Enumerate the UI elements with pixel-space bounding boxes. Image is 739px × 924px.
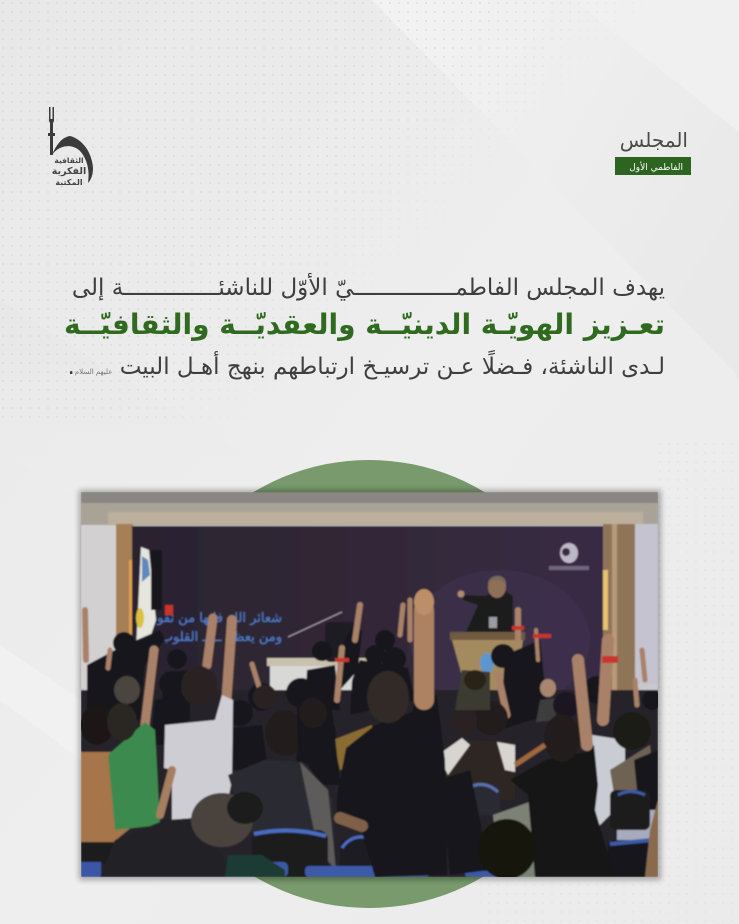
- boy in green shirt: [107, 703, 160, 830]
- logo calligraphy: [52, 156, 86, 187]
- room: ceiling, walls and curtains: [81, 492, 658, 692]
- man in black shirt at centre with raised arm: [337, 589, 447, 877]
- back row crowd: [81, 628, 662, 877]
- boy in white shirt: [160, 666, 233, 820]
- logo calligraphy: الفكرية: [52, 166, 86, 177]
- mid row heads and bodies: [114, 670, 658, 840]
- heading: council name: المجلس: [620, 128, 688, 152]
- backdrop calligraphy: ومن يعظم ـــــ القلوب: [161, 630, 282, 645]
- label: first Fatimid council: الفاطمي الأول: [629, 161, 683, 173]
- text line 1: يهدف المجلس الفاطمـــــــــــــــيّ الأوّل للناشئــــــــــــــة إلى: [72, 273, 665, 301]
- main statement text: [64, 273, 665, 380]
- boy in black shirt at right with raised arm: [510, 660, 615, 877]
- front seats with blue trim: [81, 770, 653, 877]
- microphone stand and chair: [288, 612, 342, 637]
- logo calligraphy: الثقافية: [54, 156, 84, 165]
- green circle behind photo: [145, 460, 593, 908]
- backdrop calligraphy: شعائر الله فإنها من تقوى: [147, 611, 282, 626]
- table on stage: [266, 656, 368, 692]
- backdrop calligraphy: [147, 611, 282, 645]
- red wristbands: [165, 605, 618, 663]
- speaker: [458, 576, 513, 632]
- photo shadow: [79, 490, 661, 880]
- front bottom man in hoodie: [100, 792, 285, 877]
- logo calligraphy: المكتبة: [55, 178, 83, 187]
- text line 3: لـدى الناشئة، فـضلًا عـن ترسيـخ ارتباطهم بنهج أهـل البيت عليهم السلام.: [68, 350, 665, 380]
- podium: [450, 632, 525, 690]
- boy in dark grey shirt: [228, 690, 340, 870]
- backdrop emblem: [549, 543, 589, 570]
- background: [2, 2, 552, 418]
- boy in orange shirt: [81, 710, 130, 864]
- right edge standing person: [645, 800, 658, 877]
- heading: council name: [615, 128, 691, 175]
- raised arms: [85, 600, 645, 725]
- logo: [48, 107, 93, 187]
- text line 2: highlighted in green: تعـزيز الهويّـة الدينيّــة والعقديّــة والثقافيّــة: [64, 308, 665, 341]
- stage backdrop banner: [131, 525, 604, 692]
- front bottom head: [478, 819, 536, 879]
- flag: [136, 547, 156, 650]
- photo: audience raising hands: [80, 492, 662, 879]
